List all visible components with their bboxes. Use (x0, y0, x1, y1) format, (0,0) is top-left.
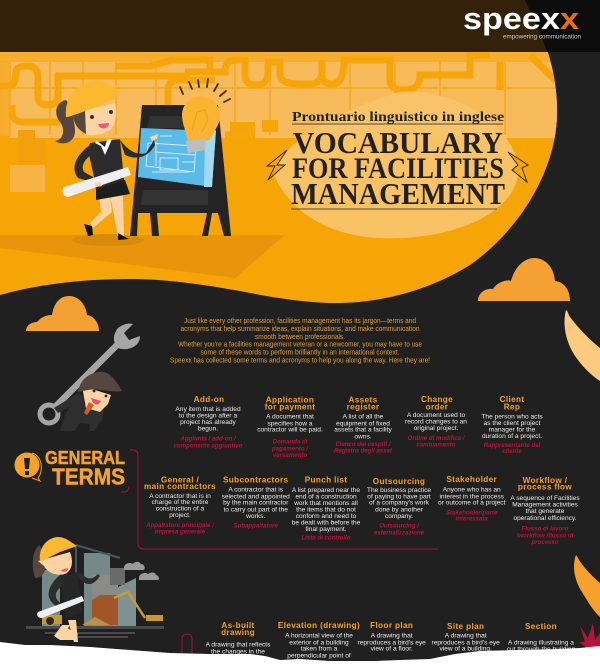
definition: duration of a project. (482, 433, 542, 440)
definition: by the main contractor (223, 500, 289, 507)
heading: for payment (265, 403, 315, 412)
illustration: woman with blueprint board (55, 79, 231, 246)
definition: A sequence of Facilities (510, 495, 580, 502)
translation: processo (530, 539, 559, 546)
definition: of a company's work (369, 500, 430, 507)
term: Outsourcing (367, 477, 431, 536)
term: Floor plan (358, 621, 426, 653)
definition: owns. (354, 434, 372, 441)
wrench (40, 324, 140, 423)
rolled plan (62, 167, 131, 197)
wrench man illustration (40, 324, 140, 431)
head (72, 103, 116, 135)
lightning bolt right (508, 152, 528, 182)
orange header background (0, 52, 558, 303)
translation: Appaltatore principale / (145, 522, 215, 529)
lightning bolt left (267, 150, 287, 180)
definition: charge of the entire (152, 499, 209, 506)
main title line 1: VOCABULARY (293, 125, 503, 160)
definition: manager for the (489, 427, 536, 434)
icon: exclamation speech bubble (14, 452, 41, 481)
definition: or outcome of a project (438, 500, 506, 507)
definition: the changes in the (211, 648, 265, 655)
translation: /workflow /flusso di (516, 532, 574, 539)
hard hat (66, 81, 121, 117)
heading: Section (525, 622, 557, 631)
translation: Outsourcing / (379, 523, 420, 530)
translation: Registro degli asset (334, 448, 393, 455)
definition: reproduces a bird's eye (432, 639, 500, 646)
heading: process flow (518, 483, 572, 492)
woman figure (55, 81, 158, 240)
definition: A contractor that is (228, 487, 284, 494)
definition: end of a construction (295, 494, 357, 501)
heading: Workflow / (523, 476, 568, 485)
construction site illustration (26, 537, 164, 642)
definition: view of a floor. (371, 646, 413, 653)
definition: that generate (526, 508, 565, 515)
intro paragraph (170, 316, 430, 364)
definition: cut through the building (507, 646, 576, 653)
translation: impresa generale (155, 529, 206, 536)
definition: A drawing illustrating a (508, 640, 574, 647)
definition: The business practice (367, 487, 431, 494)
heading: Assets (349, 395, 378, 404)
red bracket (121, 450, 438, 549)
term: Application for payment (257, 395, 323, 459)
heading text: TERMS (52, 464, 125, 490)
crimson leaf (579, 623, 600, 656)
definition: equipment of fixed (336, 420, 390, 427)
ground shadow (72, 234, 144, 246)
blueprint (138, 128, 216, 187)
easel board (130, 105, 231, 236)
translation: Flusso di lavoro (522, 526, 569, 533)
definition: record changes to an (405, 418, 467, 426)
definition: final payment. (305, 526, 347, 533)
second section red bracket (182, 634, 192, 660)
heading: Application (266, 395, 314, 404)
legs (90, 195, 124, 237)
heading: Site plan (447, 622, 484, 631)
definition: conform and need to (296, 513, 357, 520)
term: Elevation (drawing) (278, 621, 360, 660)
businessman (54, 372, 122, 431)
heading text (45, 448, 125, 490)
translation: Ordine di modifica / (408, 435, 466, 442)
intro paragraph: acronyms that help summarize ideas, explain situations, and make communication (180, 324, 420, 333)
definition: perpendicular point of (287, 653, 351, 660)
definition: view of a building. (439, 646, 492, 653)
subtitle: Prontuario linguistico in inglese (292, 109, 504, 124)
intro paragraph: some of these words to perform brilliantly in an international context. (200, 348, 400, 356)
intro paragraph: Whether you’re a facilities management veteran or a newcomer, you may have to use (178, 340, 422, 348)
title block (291, 109, 505, 211)
heading: Outsourcing (373, 477, 425, 486)
heading: Stakeholder (446, 475, 498, 484)
definition: A document that (266, 414, 314, 421)
heading: Floor plan (370, 621, 413, 630)
term: Assets register (334, 395, 393, 455)
translation: Lista di controllo (301, 535, 351, 542)
translation: versamento (273, 452, 307, 459)
heading: Change (421, 395, 453, 404)
translation: cliente (502, 448, 522, 455)
term: Change order (405, 395, 467, 449)
heading: General / (161, 475, 199, 484)
definition: taken from a (301, 646, 338, 653)
definition: The person who acts (481, 414, 543, 421)
translation: Aggiunta / add-on / (179, 436, 237, 443)
heading: register (347, 403, 380, 412)
definition: A drawing that (445, 633, 487, 640)
intro paragraph: smooth between professionals. (255, 332, 345, 341)
definition: A list of all the (343, 414, 384, 421)
definition: the items that do not (296, 506, 356, 513)
translation: Subappaltatore (234, 523, 278, 530)
definition: to the design after a (179, 412, 237, 420)
definition: work that mentions all (293, 500, 358, 507)
definition: construction of a (156, 506, 205, 513)
definition: A contractor that is in (149, 493, 211, 500)
definition: contractor will be paid. (257, 427, 323, 434)
pale highlight blob behind title (273, 92, 518, 238)
term: Subcontractors (222, 475, 290, 530)
definition: A drawing that reflects (206, 641, 271, 648)
heading: Punch list (305, 475, 347, 484)
definition: Management activities (512, 502, 579, 509)
heading: main contractors (144, 482, 216, 491)
definition: specifies how a (267, 420, 313, 427)
speexx logo: speex x (463, 1, 580, 36)
woman with hard hat (33, 537, 100, 642)
term: As-built drawing (206, 621, 271, 655)
heading: Rep (504, 402, 520, 412)
general terms heading (14, 448, 125, 490)
definition: A list prepared near the (292, 487, 360, 494)
intro paragraph: Just like every other profession, facilities management has its jargon—terms and (184, 316, 416, 325)
term: Punch list (292, 475, 361, 542)
top band (0, 0, 600, 52)
heading: Subcontractors (223, 475, 288, 484)
definition: exterior of a building (289, 639, 349, 646)
translation: Rappresentante del (484, 442, 541, 449)
translation: componente aggiuntivo (174, 443, 243, 450)
heading text: GENERAL (45, 448, 125, 468)
translation: Elenco dei cespiti / (336, 441, 392, 448)
heading: Elevation (drawing) (278, 621, 360, 630)
floor shadow (0, 235, 285, 278)
definition: selected and appointed (222, 493, 290, 500)
translation: cambiamento (416, 442, 456, 449)
torn paper bottom edge (0, 642, 600, 667)
definition: to carry out part of the (223, 507, 288, 514)
heading: Client (500, 395, 524, 404)
definition: A drawing that (371, 633, 413, 640)
definition: interest in the process (439, 493, 505, 500)
ponytail (55, 100, 75, 143)
factory window wall (0, 52, 558, 192)
definition: company. (385, 513, 413, 520)
translation: esternalizzazione (374, 529, 425, 536)
heading: drawing (221, 628, 255, 637)
term: General / main contractors (144, 475, 216, 536)
definition: be dealt with before the (292, 520, 361, 527)
heading: As-built (221, 621, 255, 630)
definition: reproduces a bird's eye (358, 639, 426, 646)
term: Stakeholder (438, 475, 506, 523)
speexx logo: empowering communication (503, 34, 581, 40)
excavator and loader (42, 592, 163, 626)
pipes (0, 55, 600, 135)
light bulb (180, 79, 230, 153)
skirt and jacket (96, 180, 130, 200)
definition: original project. (414, 425, 459, 432)
term: Section (507, 622, 576, 653)
flame shape right upper (564, 310, 600, 381)
definition: Any item that is added (175, 406, 241, 413)
heading: order (426, 402, 449, 412)
cloud right (478, 258, 570, 301)
smoke clouds (124, 562, 159, 580)
definition: A document used to (407, 412, 465, 419)
definition: of paying to have part (367, 493, 431, 500)
definition: assets that a facility (334, 427, 392, 434)
definition: works. (245, 513, 265, 520)
buildings (42, 545, 136, 628)
heading: Add-on (194, 395, 224, 404)
translation: pagamento / (271, 446, 309, 453)
cloud left (26, 296, 99, 331)
definition: A horizontal view of the (285, 633, 353, 640)
term: Client Rep (481, 395, 543, 455)
main title line 2: FOR FACILITIES (292, 152, 504, 185)
flame shape right lower (574, 555, 600, 617)
translation: interessata (456, 516, 488, 523)
term: Workflow / process flow (510, 476, 580, 546)
definition: operational efficiency. (513, 515, 577, 522)
definition: project has already (180, 419, 237, 426)
intro paragraph: Speexx has collected some terms and acronyms to help you along the way. Here they are! (170, 356, 430, 364)
definition: Anyone who has an (443, 487, 501, 494)
term: Add-on (174, 395, 243, 450)
definition: begun. (198, 426, 218, 433)
definition: as the client project (484, 420, 541, 427)
definition: project. (169, 512, 191, 519)
translation: Stakeholder/parte (446, 510, 498, 517)
definition: done by another (375, 506, 424, 513)
translation: Domanda di (273, 439, 308, 446)
term: Site plan (432, 622, 500, 653)
main title line 3: MANAGEMENT (291, 176, 505, 211)
ground strips (26, 626, 164, 638)
